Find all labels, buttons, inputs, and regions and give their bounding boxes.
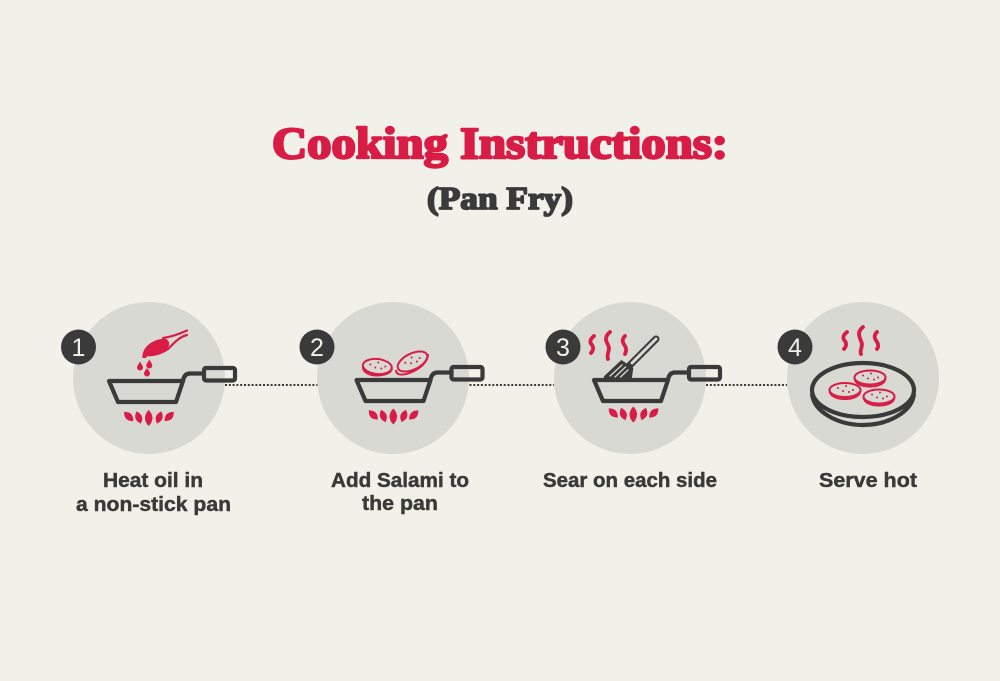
step 2 badge — [300, 330, 334, 364]
step 1 — [61, 302, 235, 516]
icon: steam — [843, 327, 878, 354]
step 2 label: Add Salami to — [331, 470, 469, 492]
icon: spatula — [605, 339, 656, 379]
icon: plate — [812, 363, 914, 425]
step 4 circle — [787, 302, 939, 454]
icon: flame — [122, 410, 176, 426]
step 3 — [543, 302, 720, 492]
icon: oil pouring — [137, 330, 187, 376]
icon: flame — [366, 408, 421, 424]
step 4 label: Serve hot — [819, 470, 917, 492]
icon: pan — [356, 367, 482, 401]
step 2 — [300, 302, 482, 515]
step 1 circle — [73, 302, 225, 454]
icon: pan — [109, 368, 235, 402]
step 2 label: the pan — [362, 493, 438, 515]
step 4 — [778, 302, 939, 492]
dotted connectors — [225, 384, 787, 386]
icon: salami slices — [362, 347, 430, 376]
step 3 circle — [554, 302, 706, 454]
step 3 badge — [546, 330, 580, 364]
icon: salami on plate — [830, 370, 894, 406]
step 1 badge — [61, 330, 96, 364]
step 1 label: Heat oil in — [103, 470, 203, 492]
step 3 label: Sear on each side — [543, 470, 717, 492]
step 2 circle — [317, 302, 469, 454]
step 4 badge: 4 — [788, 334, 802, 362]
icon: steam — [590, 332, 626, 359]
title: Cooking Instructions: — [272, 119, 728, 168]
icon: flame — [606, 406, 661, 422]
step 4 badge — [778, 330, 812, 364]
icon: pan — [594, 367, 720, 401]
step 1 badge: 1 — [72, 334, 85, 362]
step 1 label: a non-stick pan — [76, 494, 231, 516]
step 2 badge: 2 — [310, 334, 324, 362]
subtitle: (Pan Fry) — [427, 180, 573, 216]
step 3 badge: 3 — [556, 334, 570, 362]
